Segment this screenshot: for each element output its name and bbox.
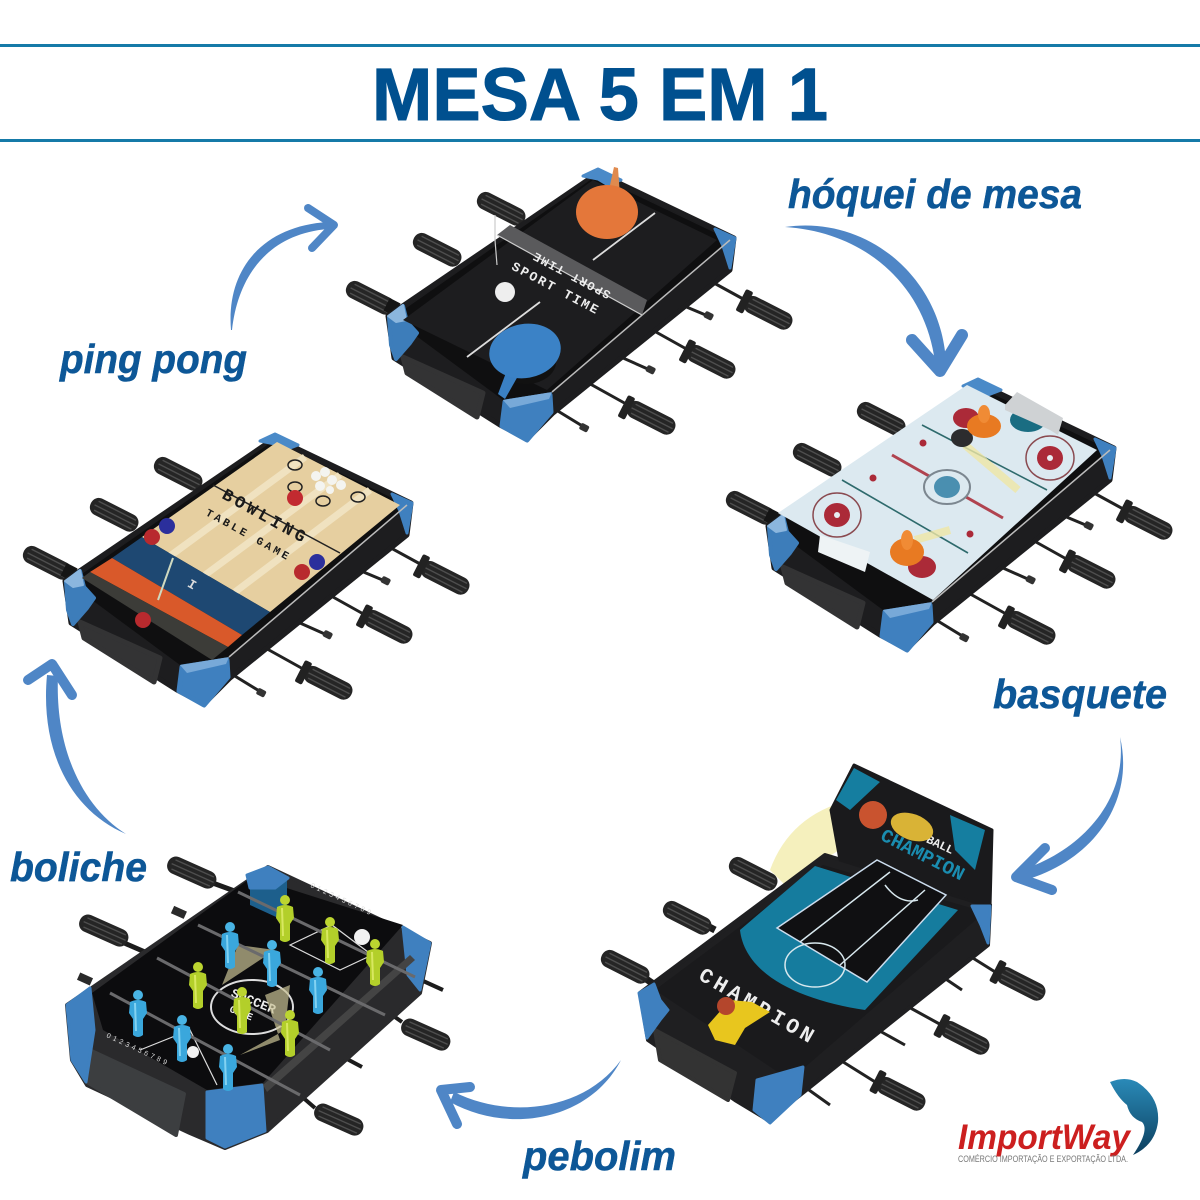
blue players xyxy=(129,922,327,1091)
right handles xyxy=(300,975,453,1138)
bowling text: BOWLING xyxy=(218,486,311,549)
dark band xyxy=(82,572,228,660)
label: hóquei de mesa: hóquei de mesa xyxy=(788,171,1082,217)
right handles xyxy=(795,950,1048,1114)
left handles xyxy=(598,854,780,987)
arrow: ping pong to hockey xyxy=(231,208,334,330)
orange pushers xyxy=(890,405,1001,566)
label: pebolim: pebolim xyxy=(522,1133,676,1179)
orange paddle xyxy=(576,167,638,239)
label: basquete: basquete xyxy=(993,671,1167,717)
backboard xyxy=(831,765,992,907)
playing surface xyxy=(403,180,717,390)
arrow: basketball to foosball xyxy=(1016,737,1123,890)
field text: GAME xyxy=(227,1005,254,1024)
navy band xyxy=(112,537,270,635)
wood lane xyxy=(142,442,400,612)
header rules xyxy=(0,44,1200,142)
center logo xyxy=(924,470,970,504)
left handles xyxy=(76,854,240,986)
backboard: CHAMPION xyxy=(877,825,968,886)
red targets xyxy=(824,408,1063,578)
drawer xyxy=(85,1048,184,1135)
net xyxy=(495,215,647,315)
rods xyxy=(110,892,415,1095)
logo: ImportWay xyxy=(958,1079,1158,1164)
yellow players xyxy=(189,895,384,1057)
game table: ping pong xyxy=(343,167,795,440)
field marks xyxy=(140,925,372,1085)
foul line xyxy=(213,485,340,553)
glow behind backboard xyxy=(770,800,872,890)
blue paddle xyxy=(485,318,565,399)
game table: bowling xyxy=(20,434,472,705)
ball xyxy=(495,282,515,302)
court lines xyxy=(785,872,925,987)
yellow emblem xyxy=(887,807,937,847)
pins xyxy=(311,467,346,494)
flying ball xyxy=(859,801,887,829)
field text: SOCCER xyxy=(229,986,278,1018)
blue corners xyxy=(639,906,990,1123)
scoreboard numbers: 0123456789 xyxy=(105,1032,171,1068)
bowling text xyxy=(203,486,311,565)
table body xyxy=(640,855,990,1120)
aiming line xyxy=(158,558,173,600)
teal court xyxy=(740,866,958,1010)
arrow: hockey to basketball xyxy=(785,225,962,371)
tagline: COMÉRCIO IMPORTAÇÃO E EXPORTAÇÃO LTDA. xyxy=(958,1154,1128,1164)
drawer xyxy=(655,1030,735,1100)
scoreboard numbers: 0123456789 xyxy=(309,882,375,918)
scoreboard numbers xyxy=(105,882,375,1068)
wordmark: ImportWay xyxy=(958,1118,1131,1157)
court lines xyxy=(467,213,655,357)
label: ping pong: ping pong xyxy=(59,336,247,382)
game table: air hockey xyxy=(723,379,1175,650)
blue corners xyxy=(67,867,430,1147)
ice surface xyxy=(778,385,1097,600)
label: boliche: boliche xyxy=(10,844,147,890)
rink lines xyxy=(842,425,1047,553)
backboard: ETBALL xyxy=(911,827,956,858)
lane stripes xyxy=(170,457,370,592)
black court xyxy=(777,860,946,982)
yellow glow xyxy=(915,445,1018,540)
orange band xyxy=(90,558,242,647)
game table: basketball xyxy=(598,765,1048,1123)
soccer balls xyxy=(187,929,370,1058)
center line xyxy=(892,455,1003,518)
numeral 1: I xyxy=(185,577,199,593)
arrow: bowling to ping pong xyxy=(28,664,126,834)
net: SPORT TIME xyxy=(530,248,613,301)
targets xyxy=(288,460,365,506)
interior xyxy=(92,877,403,1090)
scoreboard label xyxy=(818,535,870,572)
playing surface xyxy=(655,865,985,1080)
back corner xyxy=(250,875,287,922)
puck xyxy=(951,429,973,447)
title: MESA 5 EM 1 xyxy=(372,53,828,136)
goal xyxy=(1005,392,1063,435)
bowling text: TABLE GAME xyxy=(203,508,293,565)
floor text: CHAMPION xyxy=(694,965,821,1051)
gold accent xyxy=(222,945,290,1055)
balls xyxy=(135,490,325,628)
front wall rail xyxy=(263,955,415,1092)
table body xyxy=(67,867,430,1148)
floor text: SPORT TIME xyxy=(509,259,602,319)
globe icon xyxy=(1110,1079,1158,1155)
arrow: foosball to bowling xyxy=(441,1060,621,1124)
yellow launcher and ball xyxy=(708,997,770,1045)
game table: foosball xyxy=(67,854,453,1148)
